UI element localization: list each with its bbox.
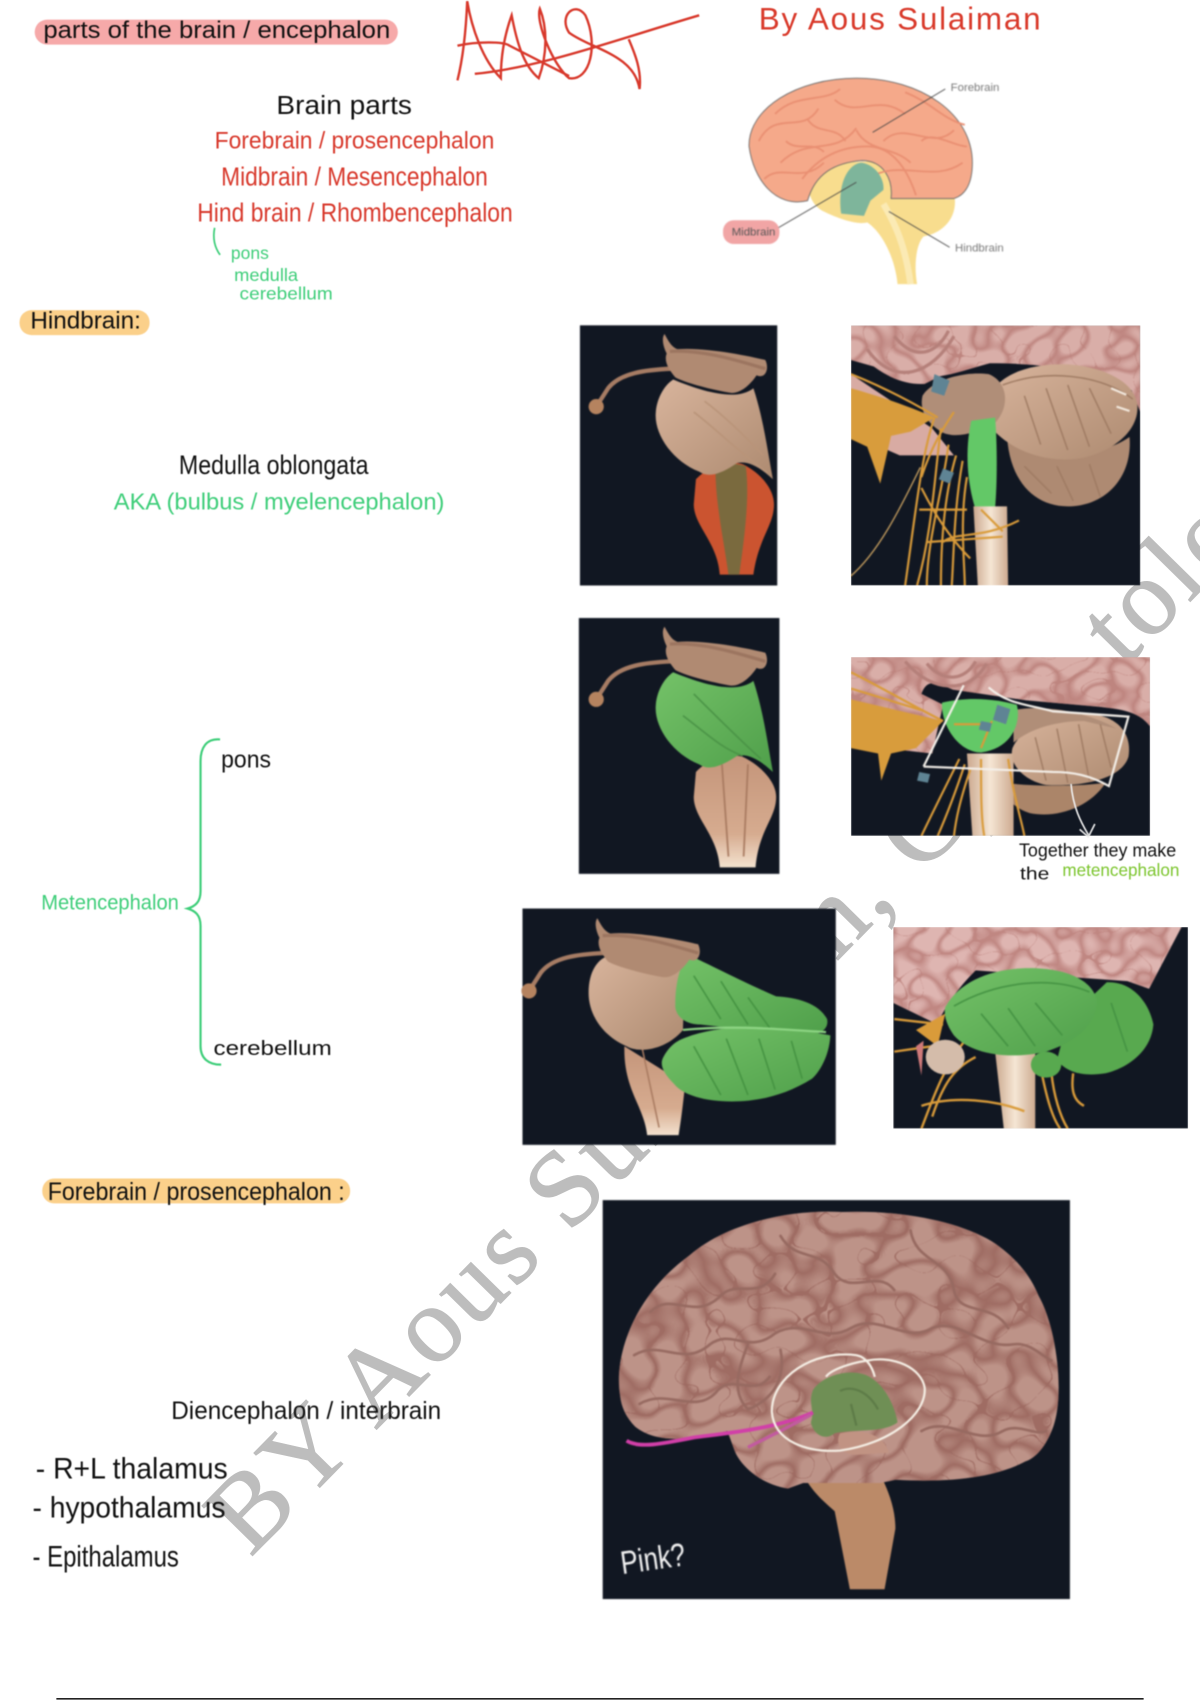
brain parts list: medulla	[234, 265, 298, 285]
metencephalon bracket with pons and cerebellum: Metencephalon	[41, 890, 179, 915]
metencephalon bracket with pons and cerebellum: cerebellum	[214, 1037, 332, 1060]
photo: translucent brain with diencephalon: Pink?	[618, 1536, 688, 1581]
note: together they make the metencephalon	[1019, 840, 1179, 883]
diagram: labelled brain: Forebrain	[951, 82, 999, 94]
note: together they make the metencephalon: Together they make	[1019, 840, 1176, 861]
photo: brainstem with green pons	[579, 618, 779, 874]
photo: translucent brain with diencephalon	[603, 1200, 1070, 1599]
photo: metencephalon outlined in white	[851, 657, 1150, 836]
section label: hindbrain: Hindbrain:	[30, 308, 141, 335]
arrow: to metencephalon note	[1071, 784, 1095, 837]
brain parts list: cerebellum	[240, 283, 333, 303]
photo: brainstem with green cerebellum	[521, 909, 836, 1145]
diencephalon parts list	[33, 1454, 228, 1574]
photo: cerebellum in context	[893, 927, 1188, 1129]
heading: parts of the brain: parts of the brain / encephalon	[43, 17, 390, 44]
diagram: labelled brain	[723, 78, 1004, 284]
photo: brainstem with red medulla	[580, 325, 777, 586]
medulla oblongata text: AKA (bulbus / myelencephalon)	[114, 489, 444, 515]
brain parts list: pons	[231, 243, 269, 263]
brain parts list: Hind brain / Rhombencephalon	[197, 197, 513, 227]
signature scribble	[457, 1, 699, 89]
metencephalon bracket with pons and cerebellum	[41, 739, 332, 1065]
diencephalon text: Diencephalon / interbrain	[171, 1397, 441, 1425]
brain parts list: Midbrain / Mesencephalon	[221, 162, 488, 192]
diencephalon parts list: - R+L thalamus	[36, 1454, 228, 1486]
diagram: labelled brain: Hindbrain	[955, 243, 1004, 255]
medulla oblongata text: Medulla oblongata	[179, 449, 369, 480]
diencephalon parts list: - hypothalamus	[33, 1493, 225, 1525]
brain parts list: Brain parts	[276, 90, 412, 120]
diencephalon parts list: - Epithalamus	[33, 1542, 179, 1574]
author credit: By Aous Sulaiman	[759, 1, 1041, 36]
brain parts list	[197, 90, 513, 303]
note: together they make the metencephalon: metencephalon	[1062, 860, 1179, 880]
medulla oblongata text	[114, 449, 444, 515]
metencephalon bracket with pons and cerebellum: pons	[221, 747, 271, 774]
diagram: labelled brain: Midbrain	[732, 226, 775, 238]
brain parts list: Forebrain / prosencephalon	[215, 128, 494, 155]
section label: forebrain: Forebrain / prosencephalon :	[48, 1178, 345, 1206]
bottom rule	[56, 1698, 1144, 1700]
photo: brain with green medulla and nerves	[850, 325, 1140, 586]
note: together they make the metencephalon: the	[1020, 863, 1049, 883]
